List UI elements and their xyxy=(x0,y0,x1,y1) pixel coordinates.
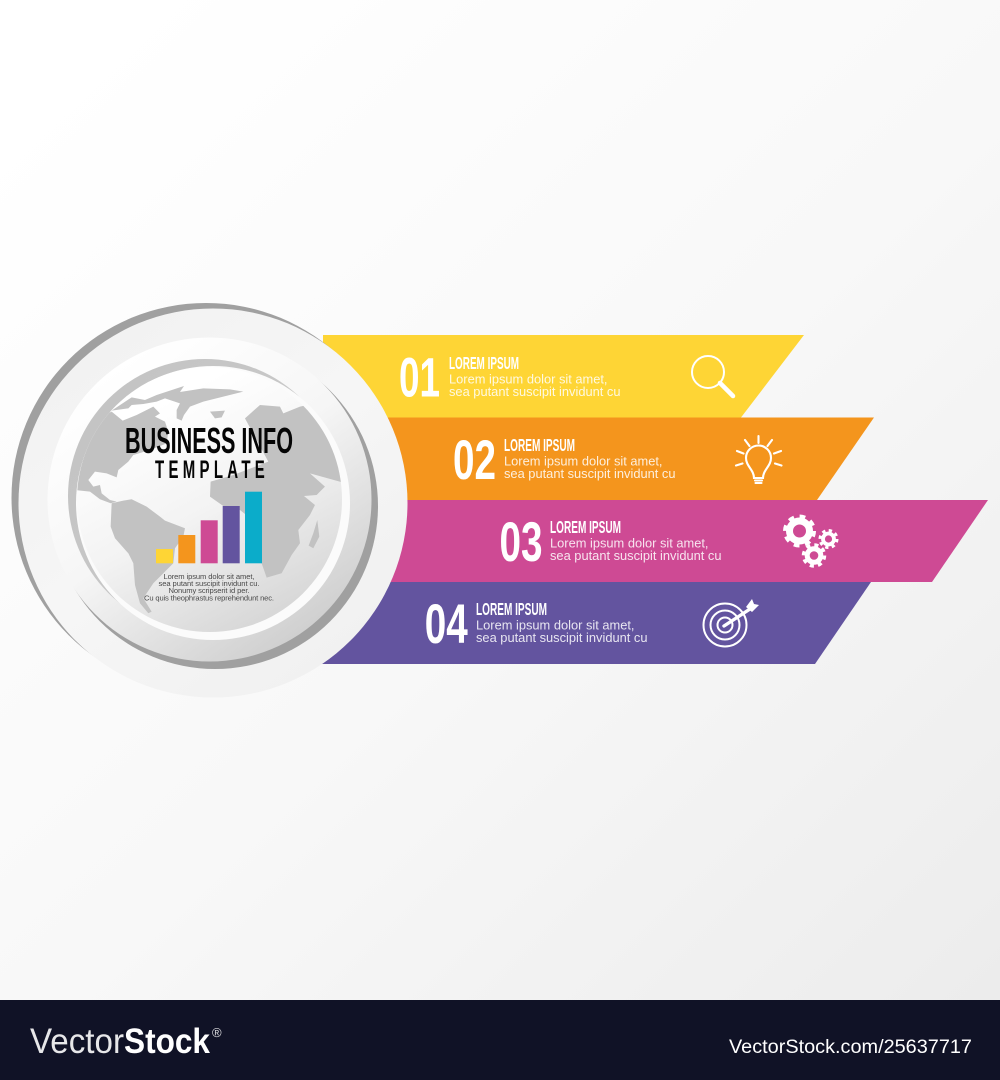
caption text: Nonumy scripserit id per. xyxy=(168,586,250,595)
circle badge xyxy=(12,303,408,698)
world map xyxy=(68,386,347,613)
item 1 text xyxy=(399,346,620,409)
caption text xyxy=(144,572,274,602)
ribbon 4 purple xyxy=(300,582,871,664)
outer grey crescent xyxy=(12,303,400,692)
inner grey crescent xyxy=(52,343,378,669)
item 2 text: LOREM IPSUM xyxy=(504,435,575,455)
outer disc xyxy=(18,308,408,698)
subtitle: TEMPLATE xyxy=(155,456,265,484)
item 4 text: sea putant suscipit invidunt cu xyxy=(476,630,648,645)
icon: magnifier xyxy=(692,356,733,396)
item 4 text: 04 xyxy=(425,592,468,655)
footer bar xyxy=(0,1000,1000,1080)
middle disc xyxy=(48,338,372,662)
footer logo xyxy=(30,1022,222,1061)
caption text: Lorem ipsum dolor sit amet, xyxy=(164,572,254,581)
footer url: VectorStock.com/25637717 xyxy=(729,1036,972,1058)
item 3 text: sea putant suscipit invidunt cu xyxy=(550,548,722,563)
icon: gears xyxy=(785,516,837,566)
item 2 text xyxy=(453,428,676,491)
ribbon 1 yellow xyxy=(323,335,804,418)
item 3 text: LOREM IPSUM xyxy=(550,517,621,537)
item 3 text xyxy=(500,510,722,573)
footer logo: Vector xyxy=(30,1022,124,1061)
item 2 text: 02 xyxy=(453,428,496,491)
item 4 text: LOREM IPSUM xyxy=(476,599,547,619)
caption text: Cu quis theophrastus reprehendunt nec. xyxy=(144,593,274,602)
white ring xyxy=(76,366,350,640)
ribbon 2 orange xyxy=(340,418,874,500)
item 1 text: LOREM IPSUM xyxy=(449,353,519,373)
icon: target xyxy=(704,599,759,646)
ribbon 3 pink xyxy=(340,500,988,582)
bar chart xyxy=(156,492,262,563)
item 1 text: Lorem ipsum dolor sit amet, xyxy=(449,372,608,386)
title: BUSINESS INFO xyxy=(125,420,293,461)
footer logo: ® xyxy=(212,1025,222,1040)
footer logo: Stock xyxy=(124,1022,210,1061)
icon: light bulb xyxy=(736,436,782,483)
item 2 text: sea putant suscipit invidunt cu xyxy=(504,466,676,481)
item 1 text: 01 xyxy=(399,346,440,409)
item 3 text: Lorem ipsum dolor sit amet, xyxy=(550,536,708,550)
item 3 text: 03 xyxy=(500,510,542,573)
item 4 text xyxy=(425,592,648,655)
caption text: sea putant suscipit invidunt cu. xyxy=(158,579,260,588)
light grey ring xyxy=(68,359,342,633)
item 1 text: sea putant suscipit invidunt cu xyxy=(449,384,620,399)
globe disc xyxy=(77,367,342,632)
item 4 text: Lorem ipsum dolor sit amet, xyxy=(476,618,634,632)
item 2 text: Lorem ipsum dolor sit amet, xyxy=(504,454,662,468)
